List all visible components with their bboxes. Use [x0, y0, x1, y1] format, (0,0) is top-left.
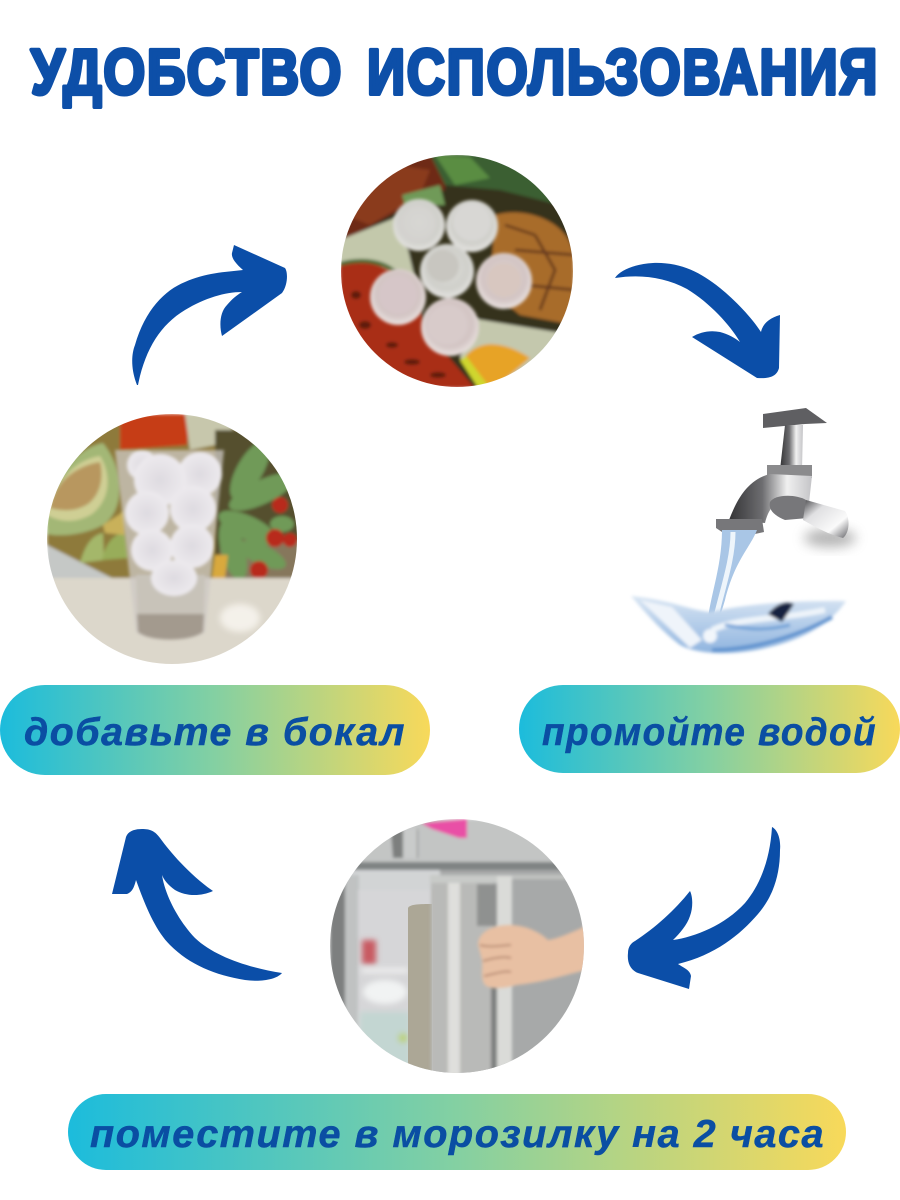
- photo: ice balls on fruit background: [340, 154, 575, 388]
- photo: water faucet: [631, 408, 856, 653]
- fridge interior: [360, 940, 410, 1072]
- photo: glass with ice balls: [46, 414, 300, 668]
- faucet handle: [763, 408, 827, 428]
- arrow: top to faucet: [615, 263, 780, 378]
- faucet arm: [803, 500, 849, 538]
- faucet body: [729, 474, 812, 523]
- water stream: [707, 530, 757, 630]
- pill: rinse with water: [519, 685, 900, 773]
- pill: put into freezer: [68, 1094, 846, 1170]
- pill: put into freezer: поместите в морозилку на 2 часа: [90, 1113, 825, 1156]
- hand: [478, 925, 586, 988]
- pill: rinse with water: промойте водой: [542, 711, 877, 754]
- arrow: glass to top: [132, 245, 287, 385]
- fridge door: [430, 874, 565, 1073]
- water basin: [631, 596, 846, 653]
- arrow: faucet to fridge: [628, 827, 780, 989]
- title: [31, 36, 879, 108]
- glass: [115, 450, 224, 640]
- title: УДОБСТВО: [31, 36, 343, 108]
- arrow: fridge to glass: [112, 829, 282, 981]
- pill: add to glass: [0, 685, 430, 775]
- magnet: [421, 819, 467, 838]
- pill: add to glass: добавьте в бокал: [24, 711, 406, 754]
- photo: hand opening fridge: [330, 819, 595, 1076]
